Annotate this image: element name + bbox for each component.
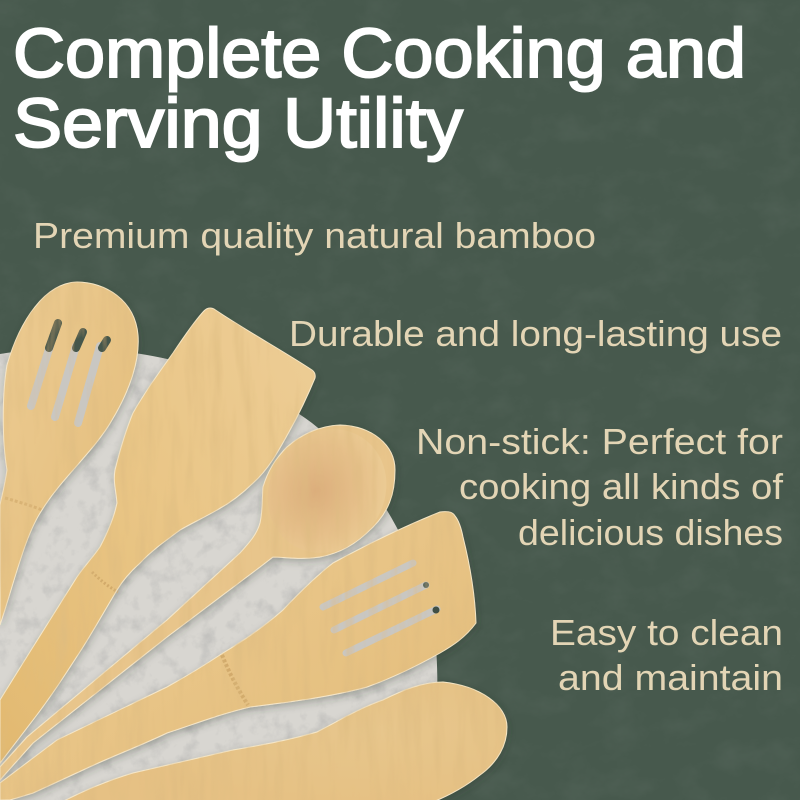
- spoon slots: [31, 323, 107, 423]
- utensil: slotted turner: [0, 512, 476, 800]
- title: Complete Cooking and: [13, 14, 746, 92]
- utensil: bottom spoon: [62, 682, 507, 800]
- feature: easy to clean: [550, 612, 783, 698]
- feature: easy to clean: and maintain: [558, 657, 783, 698]
- feature: non-stick: delicious dishes: [518, 512, 783, 553]
- utensil: wooden spoon: [0, 406, 410, 780]
- bamboo node: [222, 655, 248, 705]
- feature: non-stick: [416, 421, 784, 553]
- feature: non-stick: cooking all kinds of: [459, 466, 784, 507]
- bamboo node: [5, 498, 42, 510]
- turner slots: [323, 563, 437, 653]
- utensil: flat spatula: [0, 308, 315, 763]
- marble plate: [0, 352, 438, 800]
- feature: easy to clean: Easy to clean: [550, 612, 783, 653]
- title: [13, 14, 746, 162]
- feature: premium quality: Premium quality natural bamboo: [33, 215, 596, 256]
- spoon bowl: [244, 406, 410, 576]
- bamboo node: [92, 572, 118, 592]
- feature: non-stick: Non-stick: Perfect for: [416, 421, 783, 462]
- utensil: slotted spoon: [0, 282, 138, 625]
- title: Serving Utility: [13, 84, 463, 162]
- feature: durable: Durable and long-lasting use: [289, 313, 782, 354]
